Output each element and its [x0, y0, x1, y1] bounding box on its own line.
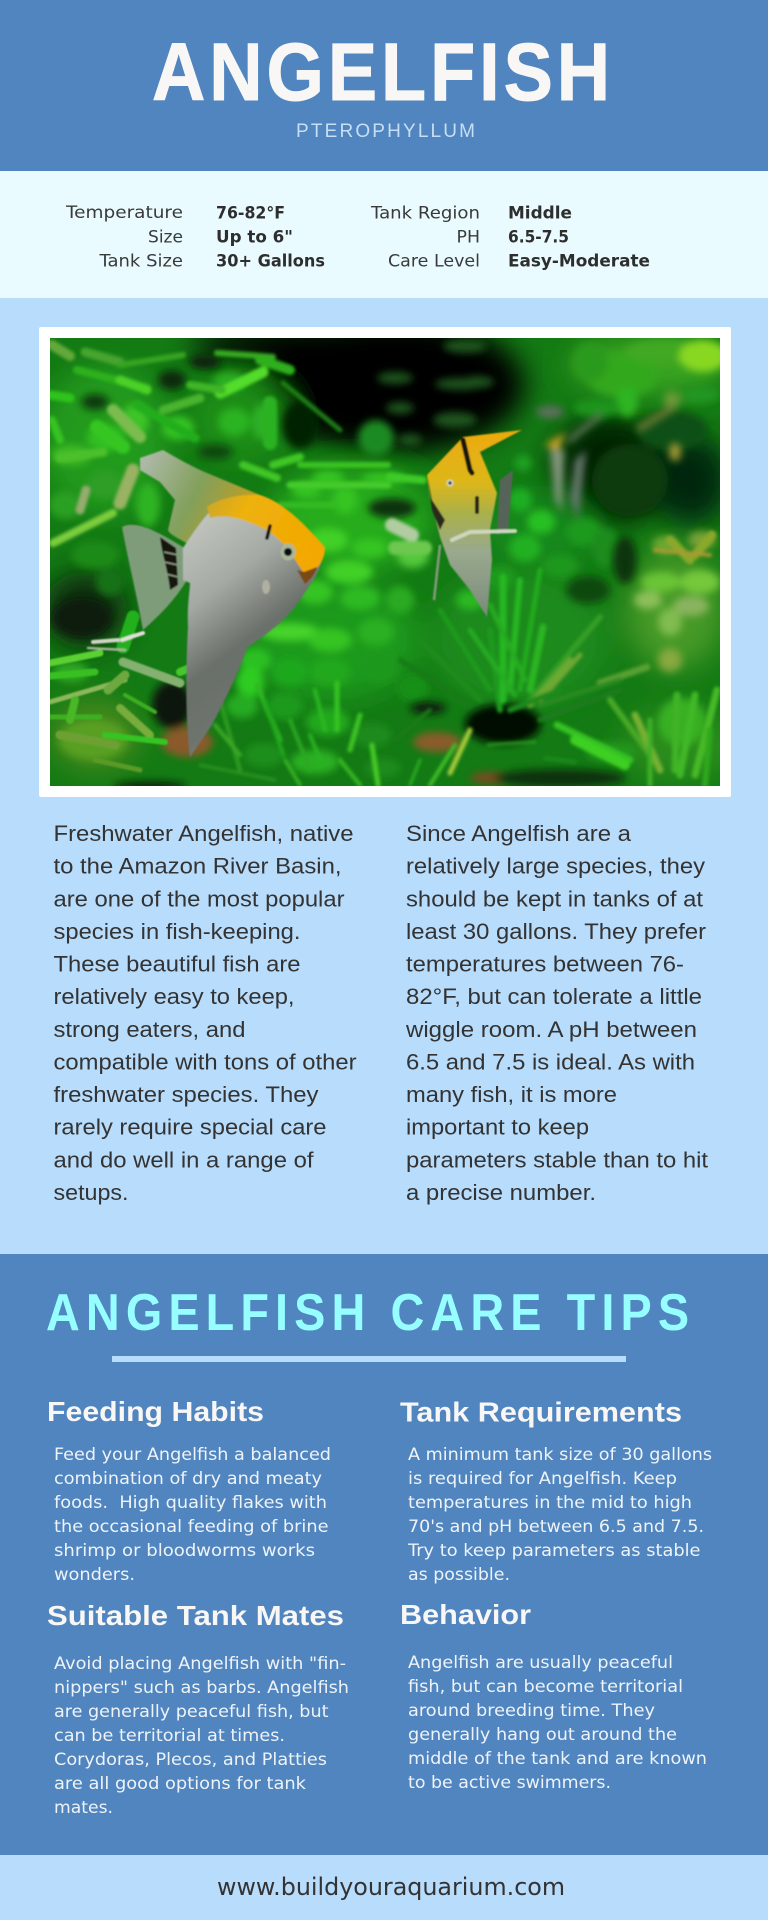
title: ANGELFISH	[152, 25, 614, 118]
care tips heading: ANGELFISH CARE TIPS	[46, 1284, 695, 1342]
subtitle: PTEROPHYLLUM	[296, 121, 475, 142]
intro text column 2: least 30 gallons. They prefer	[406, 919, 706, 944]
fan grass blades	[200, 570, 717, 785]
tip: behavior: generally hang out around the	[408, 1725, 677, 1744]
intro text column 2: 82°F, but can tolerate a little	[406, 984, 702, 1009]
tail fin	[122, 525, 187, 630]
tip: behavior: Angelfish are usually peaceful	[408, 1653, 673, 1672]
dim blurred background plants	[358, 339, 707, 516]
intro text column 1: and do well in a range of	[54, 1147, 314, 1172]
tip: feeding habits: Feeding Habits	[47, 1396, 264, 1427]
intro text column 2	[405, 821, 708, 1205]
tail stripes	[160, 537, 178, 590]
intro text column 1: These beautiful fish are	[54, 952, 300, 976]
low frequency tones	[40, 317, 740, 780]
heading underline	[112, 1356, 626, 1362]
facts column 2: Middle	[508, 204, 572, 222]
intro text column 1	[54, 821, 356, 1205]
tip: suitable tank mates: can be territorial at times.	[54, 1726, 285, 1745]
intro text column 1: setups.	[54, 1180, 128, 1205]
intro text column 1: Freshwater Angelfish, native	[54, 821, 354, 846]
tip: feeding habits: Feed your Angelfish a balanced	[54, 1445, 331, 1464]
tip: tank requirements: Try to keep parameters as stable	[407, 1541, 700, 1560]
intro text column 2: many fish, it is more	[406, 1082, 617, 1107]
left leaves	[50, 345, 712, 560]
tip: tank requirements: Tank Requirements	[400, 1396, 682, 1428]
large gold-headed angelfish	[122, 450, 325, 757]
fish eye and mark	[280, 544, 296, 560]
facts column 2: 6.5-7.5	[508, 228, 569, 246]
intro text column 2: important to keep	[406, 1115, 589, 1140]
footer band	[0, 1855, 768, 1920]
facts column 2: PH	[456, 228, 480, 246]
body	[183, 496, 322, 757]
third fish, out of focus	[536, 406, 600, 520]
facts column 1: Size	[148, 228, 183, 246]
tip: suitable tank mates: Corydoras, Plecos, and Platties	[54, 1750, 327, 1769]
intro text column 2: Since Angelfish are a	[406, 821, 632, 846]
care tips panel background	[0, 1254, 768, 1855]
intro text column 1: are one of the most popular	[54, 886, 344, 911]
intro panel background	[0, 298, 768, 1254]
facts column 2	[370, 204, 650, 270]
facts column 1: 76-82°F	[216, 204, 285, 222]
intro text column 2: a precise number.	[406, 1180, 596, 1205]
yellow head	[207, 495, 325, 573]
tip: suitable tank mates: are all good options for tank	[54, 1774, 306, 1793]
tip: suitable tank mates: mates.	[54, 1798, 113, 1817]
facts column 1: Up to 6"	[216, 228, 293, 246]
tip: suitable tank mates: Avoid placing Angelfish with "fin-	[54, 1654, 346, 1673]
intro text column 2: relatively large species, they	[406, 854, 705, 879]
intro text column 2: should be kept in tanks of at	[406, 886, 703, 911]
tip: behavior: to be active swimmers.	[408, 1773, 611, 1792]
facts column 1	[65, 203, 325, 270]
photo: angelfish in planted aquarium	[39, 317, 740, 797]
facts column 1: Tank Size	[98, 252, 183, 270]
tip: feeding habits: combination of dry and meaty	[54, 1469, 322, 1488]
intro text column 2: parameters stable than to hit	[406, 1147, 708, 1172]
darker pockets and gravel	[52, 355, 637, 790]
second angelfish, yellow head	[427, 430, 522, 617]
tip: feeding habits: shrimp or bloodworms works	[54, 1541, 315, 1560]
tip: tank requirements: as possible.	[408, 1565, 510, 1584]
intro text column 2: temperatures between 76-	[406, 952, 684, 976]
intro text column 1: relatively easy to keep,	[54, 984, 294, 1009]
tip: feeding habits	[47, 1396, 331, 1584]
tip: suitable tank mates: Suitable Tank Mates	[47, 1600, 344, 1631]
tip: tank requirements: is required for Angelfish. Keep	[408, 1469, 677, 1488]
website url: www.buildyouraquarium.com	[217, 1873, 565, 1901]
tip: feeding habits: wonders.	[54, 1565, 135, 1584]
facts column 2: Care Level	[388, 252, 480, 270]
info band: quick facts	[0, 171, 768, 298]
intro text column 1: strong eaters, and	[54, 1017, 246, 1042]
intro text column 1: species in fish-keeping.	[54, 919, 300, 944]
tip: suitable tank mates: nippers" such as barbs. Angelfish	[54, 1678, 349, 1697]
intro text column 2: 6.5 and 7.5 is ideal. As with	[406, 1050, 695, 1074]
intro text column 2: wiggle room. A pH between	[405, 1017, 697, 1042]
top right foliage	[514, 339, 727, 471]
bottom-left leaves	[50, 617, 190, 770]
intro text column 1: freshwater species. They	[54, 1082, 318, 1107]
facts column 2: Easy-Moderate	[508, 252, 650, 270]
tip: behavior: Behavior	[400, 1599, 531, 1630]
facts column 1: 30+ Gallons	[216, 252, 325, 270]
tip: tank requirements	[400, 1396, 712, 1584]
bright mid-ground foliage blobs	[49, 372, 720, 778]
intro text column 1: compatible with tons of other	[54, 1050, 356, 1074]
tip: feeding habits: the occasional feeding of brine	[54, 1517, 328, 1536]
dorsal fin	[140, 450, 260, 545]
header band	[0, 0, 768, 171]
tip: suitable tank mates	[47, 1600, 349, 1817]
tip: behavior: middle of the tank and are known	[408, 1749, 707, 1768]
tip: behavior	[400, 1599, 707, 1792]
facts column 2: Tank Region	[370, 204, 480, 222]
facts column 1: Temperature	[65, 203, 183, 222]
tip: suitable tank mates: are generally peaceful fish, but	[54, 1702, 329, 1721]
tip: behavior: around breeding time. They	[408, 1701, 655, 1720]
intro text column 1: to the Amazon River Basin,	[54, 854, 342, 879]
tip: behavior: fish, but can become territorial	[408, 1677, 683, 1696]
tip: feeding habits: foods. High quality flakes with	[54, 1493, 327, 1512]
tip: tank requirements: temperatures in the mid to high	[408, 1493, 692, 1512]
tip: tank requirements: 70's and pH between 6.5 and 7.5.	[408, 1517, 704, 1536]
tip: tank requirements: A minimum tank size of 30 gallons	[408, 1445, 712, 1464]
intro text column 1: rarely require special care	[54, 1115, 326, 1140]
